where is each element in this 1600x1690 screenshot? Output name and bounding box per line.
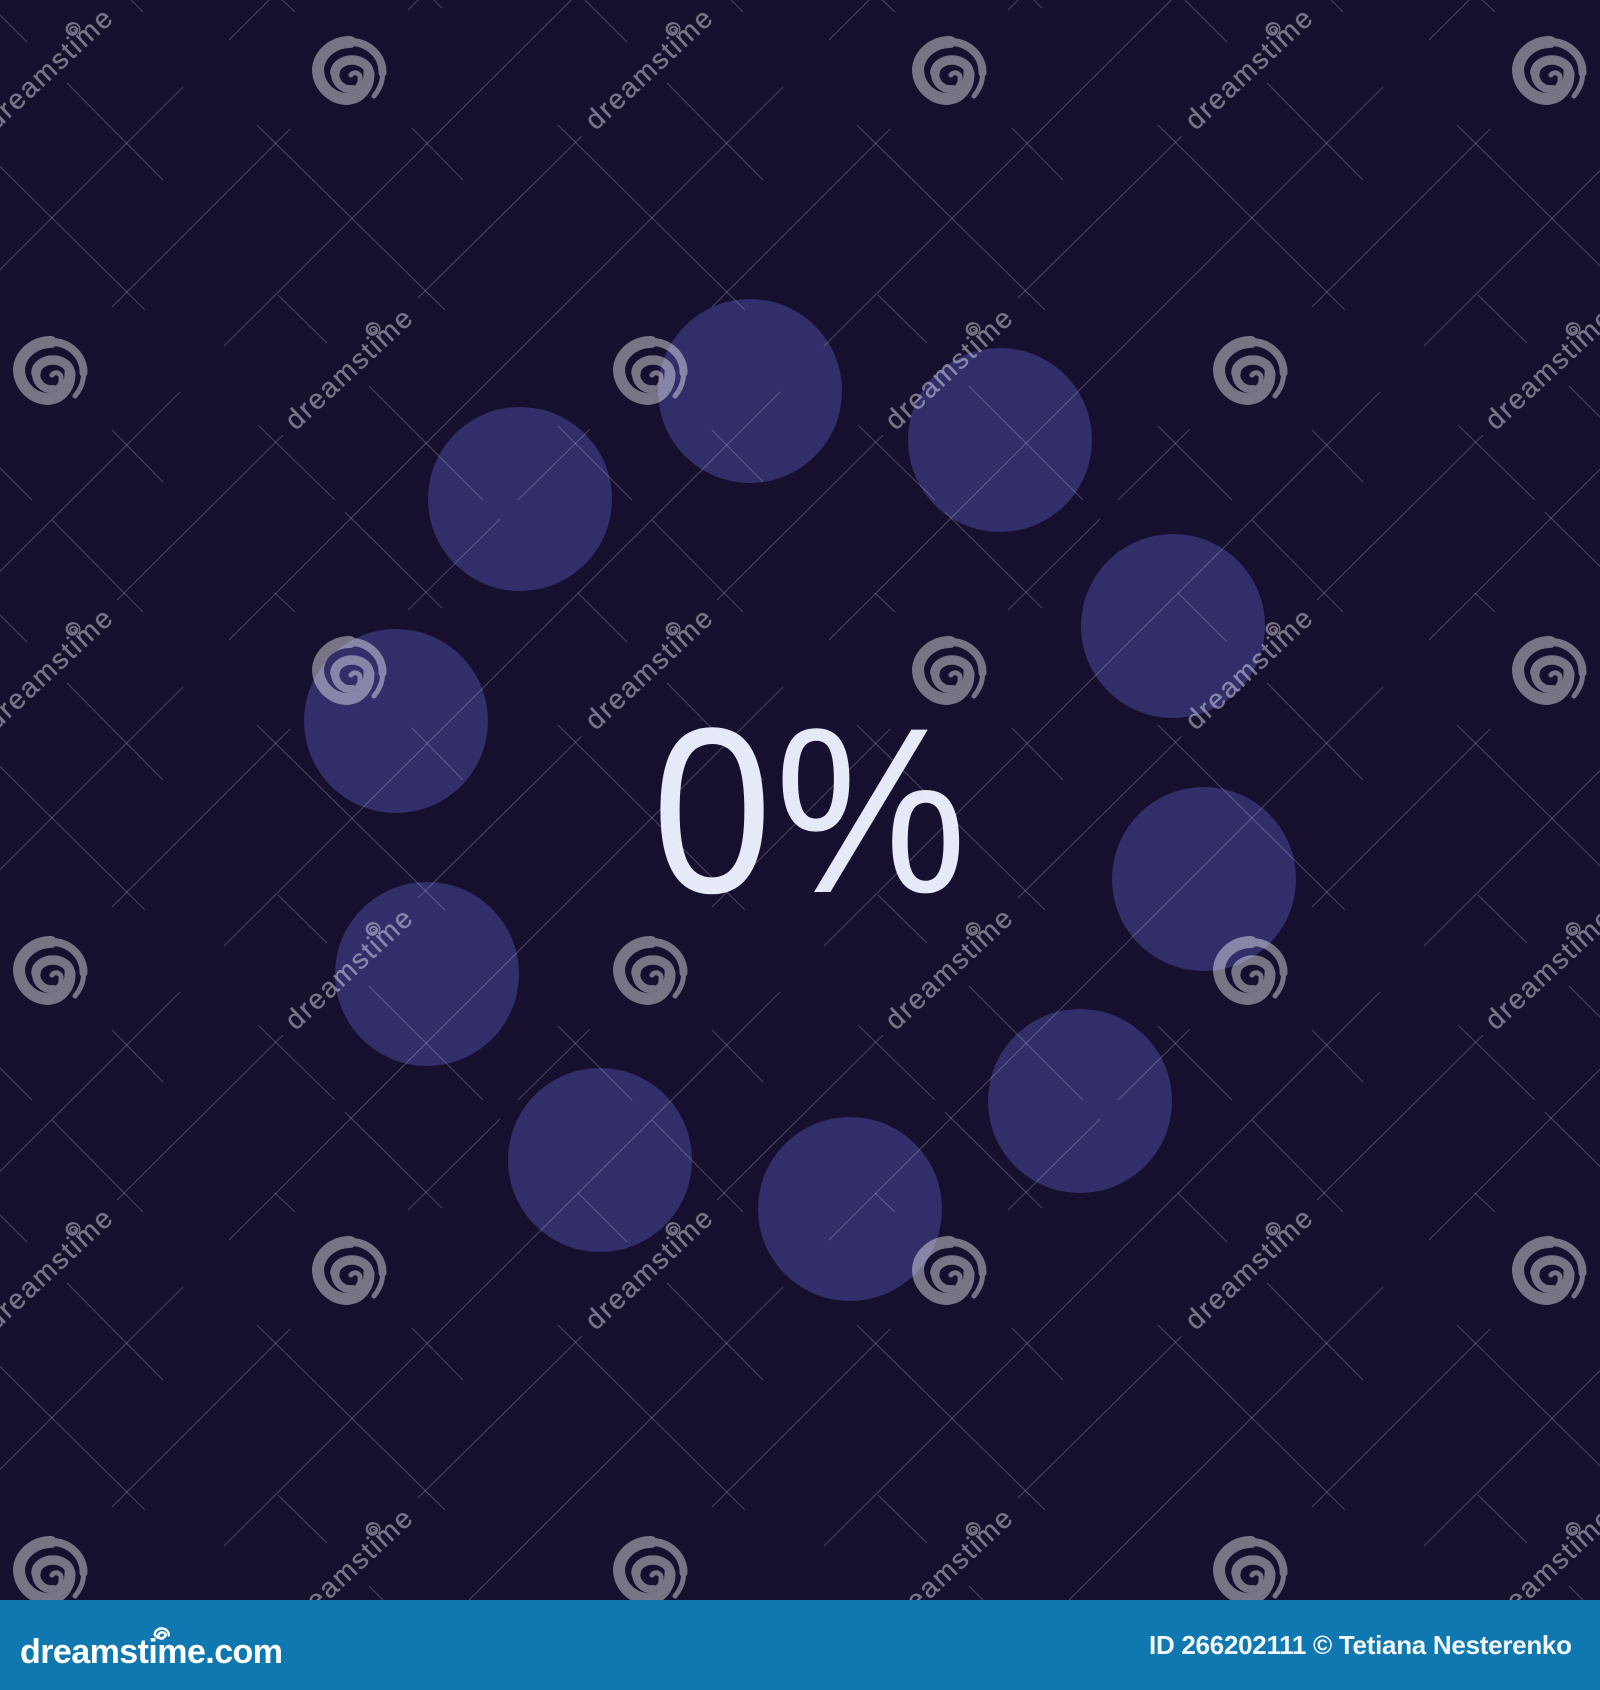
dot 4 — [1112, 787, 1296, 971]
footer band — [0, 1600, 1600, 1690]
dot 5 — [988, 1009, 1172, 1193]
dot 7 — [508, 1068, 692, 1252]
footer logo text: dreamstime.com — [20, 1633, 283, 1671]
percentage label: 0% — [652, 678, 967, 942]
dot 9 — [304, 629, 488, 813]
dot 3 — [1081, 534, 1265, 718]
loading spinner ring of ten dots — [304, 299, 1296, 1301]
dot 10 — [428, 407, 612, 591]
dot 8 — [335, 882, 519, 1066]
dot 1 — [658, 299, 842, 483]
dot 2 — [908, 348, 1092, 532]
image id and credit: ID 266202111 © Tetiana Nesterenko — [1149, 1630, 1572, 1660]
footer logo spiral — [155, 1628, 169, 1639]
dot 6 — [758, 1117, 942, 1301]
